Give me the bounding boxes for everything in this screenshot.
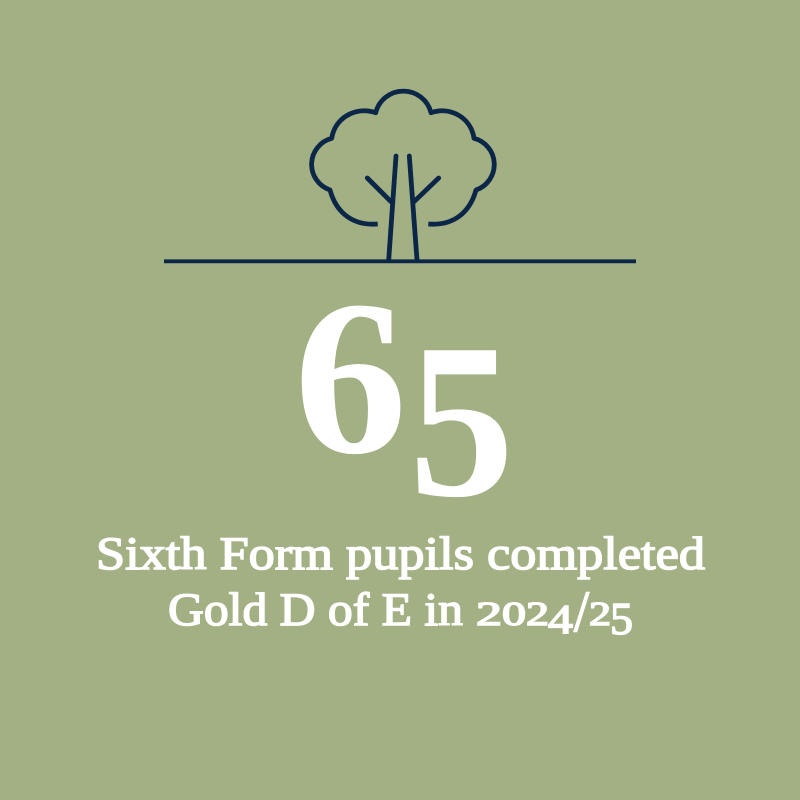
- caption: 2: [589, 596, 611, 633]
- caption: Sixth Form pupils completed: [96, 528, 705, 580]
- big number 65: 6: [294, 255, 407, 500]
- caption: 2: [526, 596, 549, 633]
- big number 65: 5: [409, 298, 514, 543]
- caption: Gold D of E in: [168, 584, 463, 636]
- caption: 5: [610, 593, 633, 644]
- caption: /: [574, 579, 590, 644]
- caption: 4: [548, 596, 573, 642]
- caption: 0: [502, 596, 526, 633]
- big number 65: [294, 255, 514, 543]
- caption: [96, 528, 705, 644]
- caption: 2: [476, 596, 502, 633]
- icon: tree on ground line: [164, 91, 636, 261]
